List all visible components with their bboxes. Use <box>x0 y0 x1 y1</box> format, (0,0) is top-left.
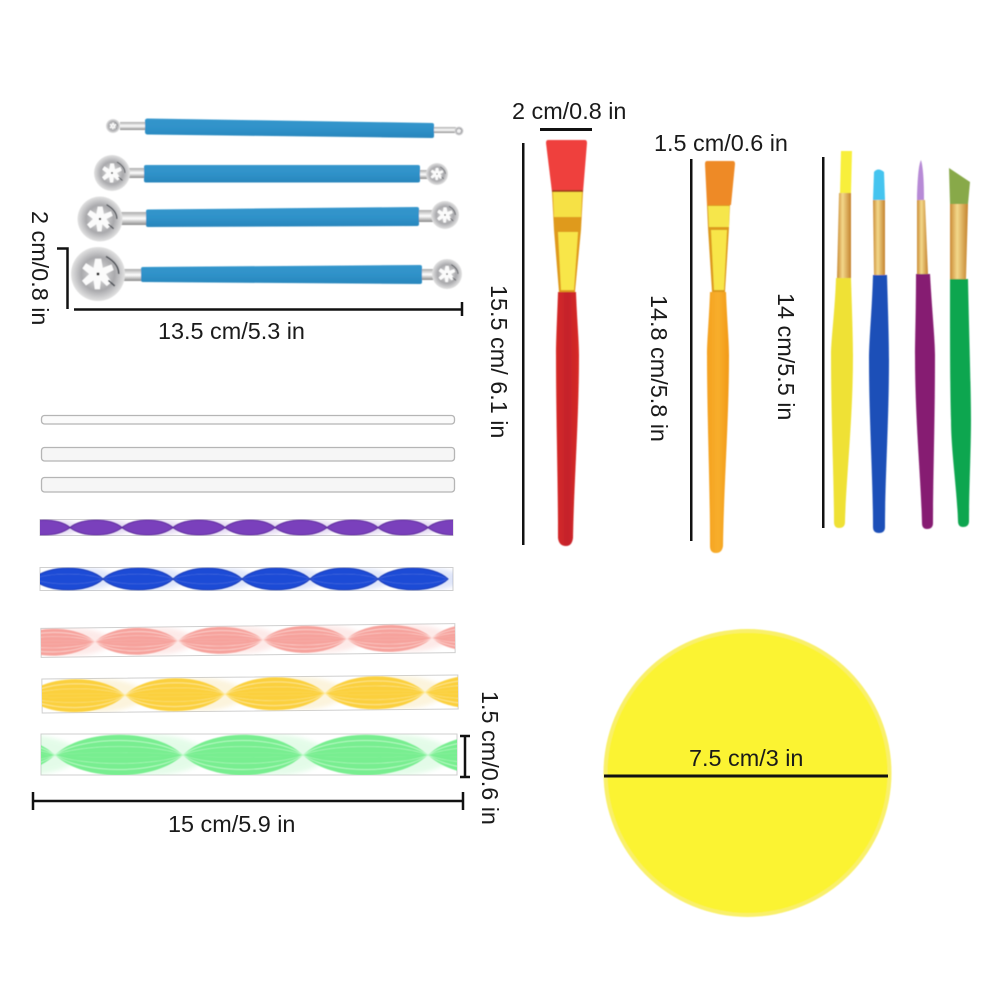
purple twisted rod <box>18 520 491 536</box>
label: 7.5 cm: 7.5 cm/3 in <box>689 745 803 771</box>
dimension: red brush width <box>540 128 592 131</box>
green twisted rod <box>40 734 458 776</box>
dimension: stylus length <box>74 302 462 316</box>
panel: round sponge <box>604 629 892 917</box>
label: 14.8 cm: 14.8 cm/5.8 in <box>646 295 672 442</box>
label: 1.5 cm: 1.5 cm/0.6 in <box>477 691 503 825</box>
dimension: orange brush length <box>690 159 692 541</box>
dimension: rod length <box>33 792 463 810</box>
blue twisted rod <box>33 568 465 590</box>
clear rod 3 <box>42 478 454 492</box>
panel: dotting rods <box>32 414 499 832</box>
ball stylus 1 <box>106 118 464 138</box>
dimension: small brush length <box>822 157 824 528</box>
ball stylus 4 <box>71 247 462 301</box>
label: 1.5 cm width: 1.5 cm/0.6 in <box>654 130 788 156</box>
ball stylus 2 <box>94 155 448 191</box>
dimension: sponge diameter <box>604 774 888 778</box>
label: 15.5 cm: 15.5 cm/ 6.1 in <box>486 285 512 438</box>
label: 14 cm: 14 cm/5.5 in <box>773 293 799 420</box>
label: 13.5 cm: 13.5 cm/5.3 in <box>158 318 305 344</box>
panel: orange brush <box>646 130 788 553</box>
yellow twisted rod <box>41 674 459 714</box>
purple brush <box>915 160 935 529</box>
panel: ball stylus tools <box>27 118 464 344</box>
clear rod 2 <box>42 448 454 461</box>
panel: red brush <box>486 98 626 546</box>
sponge <box>604 629 892 917</box>
pink twisted rod <box>40 623 456 658</box>
red brush body <box>546 140 587 546</box>
orange brush body <box>705 161 735 553</box>
ball stylus 3 <box>78 196 459 242</box>
panel: four small brushes <box>773 151 971 533</box>
dimension: red brush length <box>522 143 524 545</box>
label: 15 cm: 15 cm/5.9 in <box>168 811 295 837</box>
blue brush <box>869 170 889 533</box>
label: 2 cm: 2 cm/0.8 in <box>27 211 53 325</box>
dimension: rod diameter <box>460 736 470 777</box>
yellow brush <box>831 151 853 528</box>
dimension: stylus height <box>57 248 68 309</box>
green brush <box>949 168 971 527</box>
clear rod 1 <box>42 416 454 424</box>
label: 2 cm width: 2 cm/0.8 in <box>512 98 626 124</box>
